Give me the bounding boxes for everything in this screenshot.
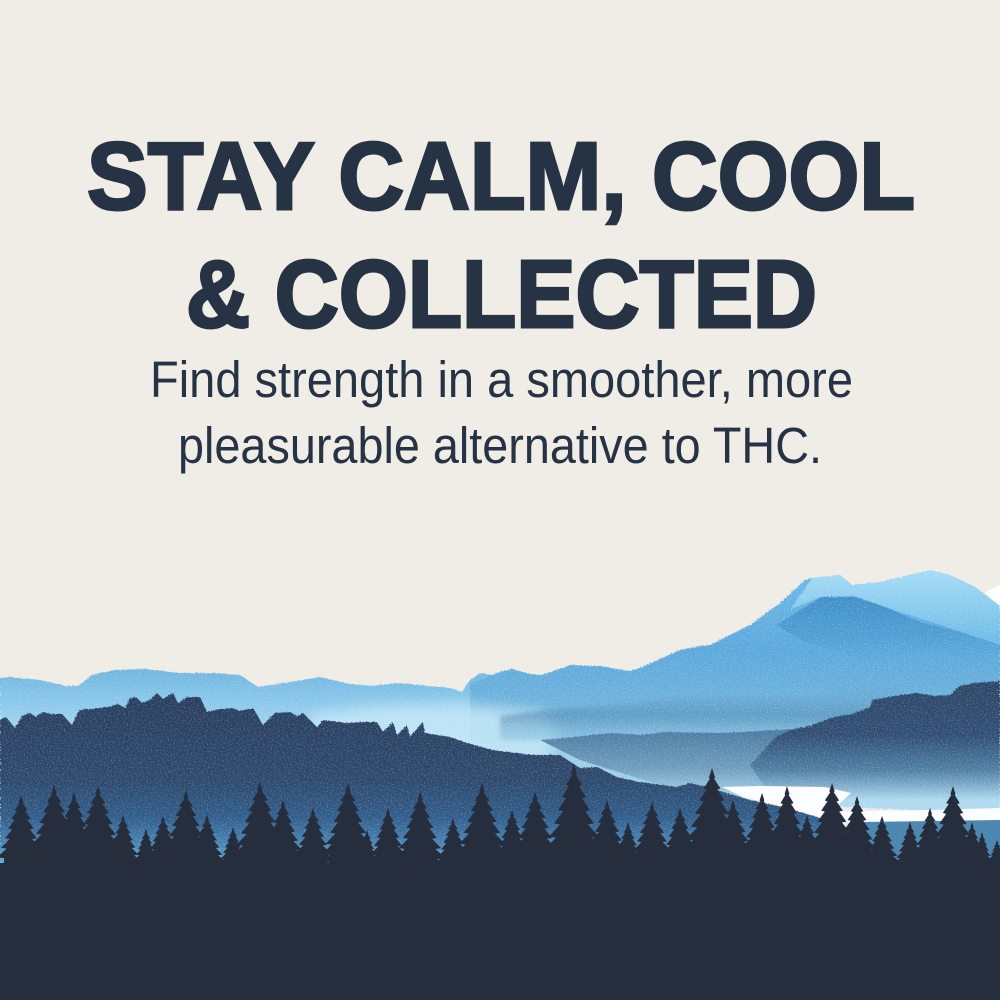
middle band <box>540 720 1000 815</box>
heading: STAY CALM, COOL <box>87 123 915 230</box>
foreground ground <box>0 863 1000 1000</box>
far ridge and mountain layers <box>0 570 1000 815</box>
watercolor landscape <box>0 570 1000 870</box>
pine trees <box>0 764 1000 878</box>
forest silhouette <box>0 764 1000 1000</box>
inner mountain peak <box>777 597 1000 668</box>
mottled mist band <box>500 686 900 740</box>
pale mist on the left ridge <box>310 704 560 770</box>
water below the lake <box>860 820 1000 870</box>
heading <box>87 123 915 348</box>
subheading: pleasurable alternative to THC. <box>178 417 822 474</box>
subheading: Find strength in a smoother, more <box>150 351 853 408</box>
dark forest hill <box>0 693 880 870</box>
heading: & COLLECTED <box>186 241 817 348</box>
far left ridge <box>0 669 500 780</box>
distant white patch at right edge <box>985 585 1000 610</box>
upper mountain highlight <box>790 570 1000 645</box>
dark right ridge <box>750 681 1000 812</box>
main mountain <box>470 570 1000 800</box>
subheading <box>150 351 853 474</box>
lower lake highlight <box>815 808 1000 824</box>
upper lake highlight <box>722 786 851 817</box>
